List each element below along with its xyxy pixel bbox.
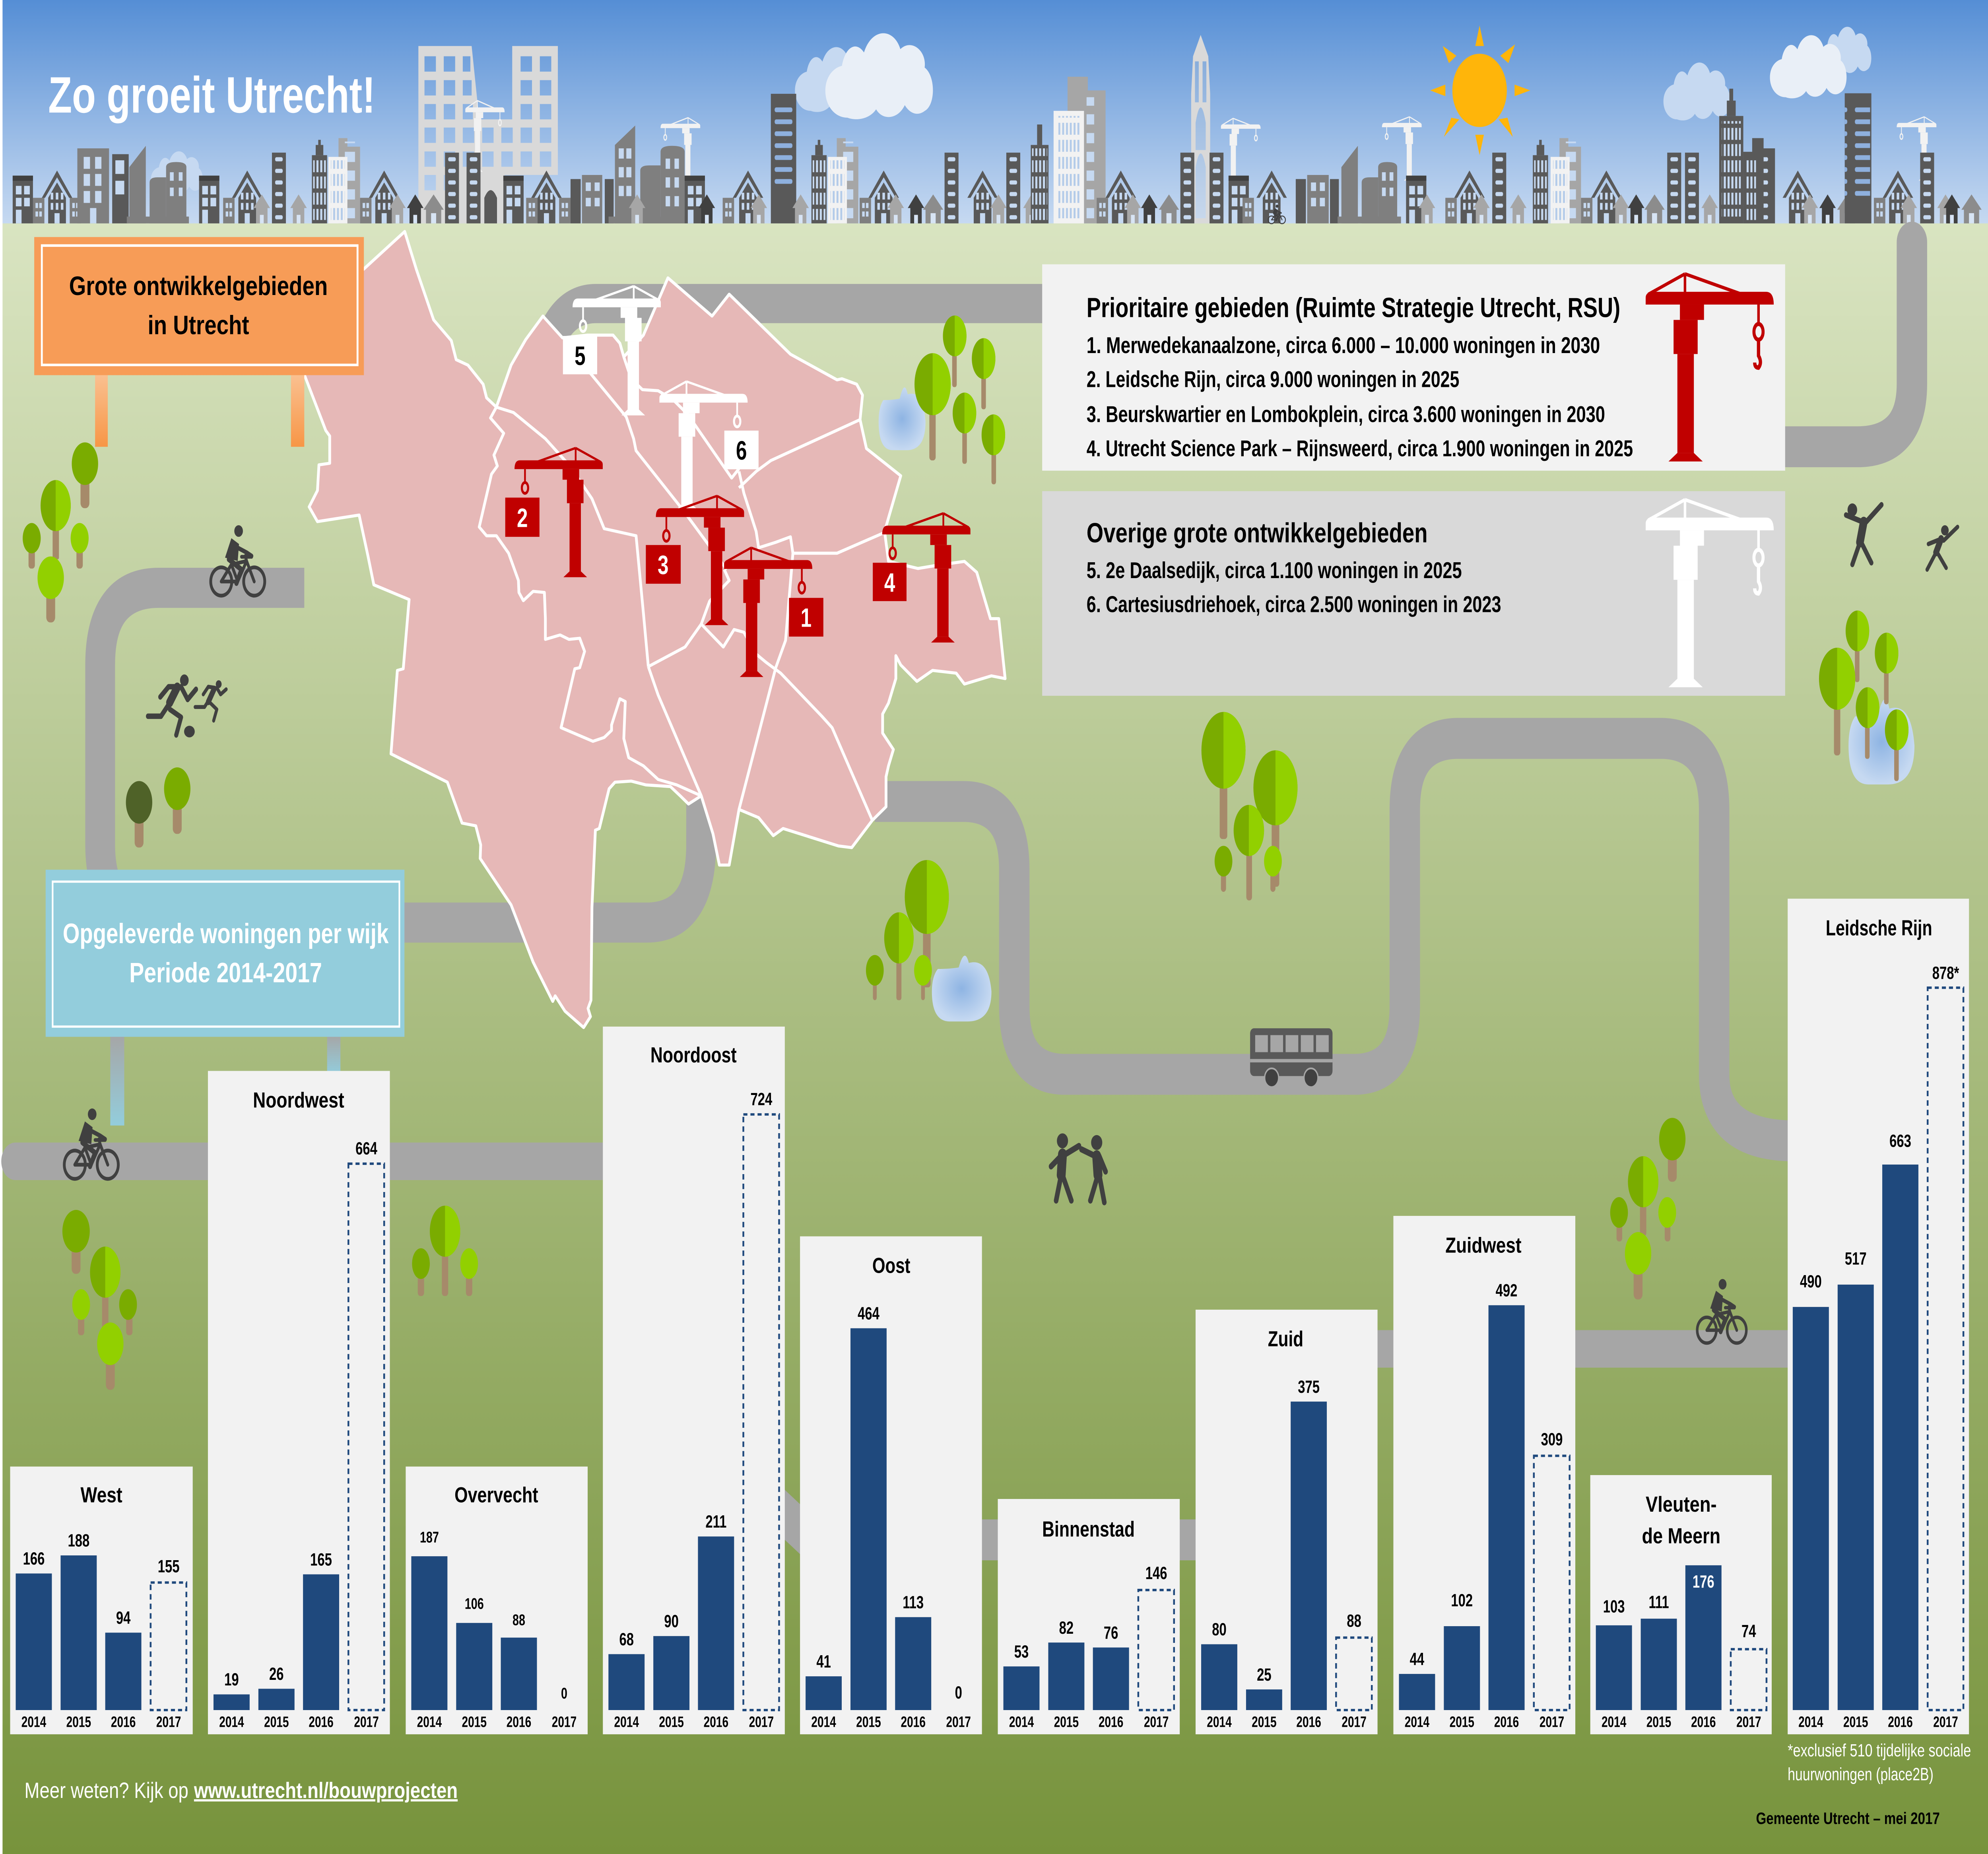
bars: 517: [1845, 1249, 1867, 1269]
list: 5. 2e Daalsedijk, circa 1.100 woningen in 2025: [1087, 558, 1462, 583]
skyline background: large building: [418, 46, 558, 223]
years: [614, 1714, 774, 1731]
years: [1602, 1714, 1761, 1731]
years: 2016: [507, 1714, 531, 1731]
crane marker 3: 3: [658, 551, 668, 580]
years: 2015: [659, 1714, 684, 1731]
years: [21, 1714, 181, 1731]
bars: [1596, 1565, 1767, 1710]
bars: [16, 1531, 186, 1710]
panel: West: [10, 1467, 193, 1734]
roads: [15, 242, 1912, 1540]
lakes: [879, 387, 1914, 1021]
sign: opgeleverde woningen: Opgeleverde woningen per wijk: [63, 918, 389, 949]
years: 2014: [1405, 1714, 1430, 1731]
heading: Leidsche Rijn: [1826, 916, 1932, 940]
heading: Overige grote ontwikkelgebieden: [1087, 517, 1428, 549]
heading: de Meern: [1642, 1524, 1720, 1548]
bars: [806, 1304, 962, 1710]
icon: white crane: [1646, 500, 1774, 687]
bars: 664: [355, 1139, 377, 1159]
bars: 309: [1541, 1430, 1563, 1449]
bars: [214, 1139, 384, 1710]
years: 2017: [1540, 1714, 1564, 1731]
years: 2014: [1207, 1714, 1232, 1731]
title: Zo groeit Utrecht!: [48, 66, 375, 124]
bars: 82: [1059, 1618, 1074, 1638]
bars: 166: [23, 1549, 45, 1569]
years: [1207, 1714, 1367, 1731]
heading: Oost: [872, 1254, 911, 1278]
heading: Zuidwest: [1445, 1233, 1522, 1258]
crane marker 4: 4: [884, 568, 895, 598]
panel: Noordoost: [603, 1027, 785, 1734]
crane marker 1: [724, 548, 823, 677]
bars: [1793, 963, 1963, 1710]
footnote: *exclusief 510 tijdelijke sociale: [1788, 1741, 1971, 1761]
years: 2015: [1252, 1714, 1277, 1731]
bars: 88: [513, 1611, 525, 1629]
icon: cyclist: [1697, 1279, 1746, 1343]
bars: 106: [465, 1596, 484, 1613]
icon: cyclist: [64, 1109, 118, 1179]
panel: Vleuten-de Meern: [1590, 1475, 1772, 1734]
crane marker 6: [659, 381, 759, 511]
years: [1009, 1714, 1169, 1731]
years: 2014: [219, 1714, 244, 1731]
bars: 88: [1347, 1611, 1361, 1631]
years: [1798, 1714, 1958, 1731]
years: [219, 1714, 379, 1731]
credit: Gemeente Utrecht – mei 2017: [1756, 1809, 1940, 1828]
bars: 53: [1014, 1642, 1029, 1662]
bars: 492: [1496, 1281, 1517, 1301]
panel: Noordwest: [208, 1071, 390, 1734]
bars: 375: [1298, 1377, 1320, 1397]
bars: 25: [1257, 1665, 1272, 1685]
years: 2017: [156, 1714, 181, 1731]
skyline buildings: [13, 77, 1982, 224]
link text: [25, 1778, 458, 1803]
bars: 188: [68, 1531, 89, 1551]
heading: [1642, 1492, 1720, 1548]
crane marker 6: 6: [736, 436, 747, 466]
list: [1087, 333, 1633, 461]
icon: soccer players: [148, 674, 226, 738]
list: 1. Merwedekanaalzone, circa 6.000 – 10.000 woningen in 2030: [1087, 333, 1600, 358]
panel: prioritaire gebieden: [1042, 264, 1785, 471]
heading: West: [80, 1483, 122, 1507]
years: 2017: [749, 1714, 774, 1731]
clouds: [151, 27, 1871, 194]
heading: Vleuten-: [1646, 1492, 1717, 1517]
bars: 464: [858, 1304, 879, 1324]
years: 2017: [946, 1714, 971, 1731]
years: 2016: [1099, 1714, 1123, 1731]
years: 2014: [417, 1714, 442, 1731]
crane marker 4: [873, 513, 971, 643]
years: 2015: [1646, 1714, 1671, 1731]
bars: [1399, 1281, 1570, 1710]
years: [811, 1714, 971, 1731]
years: 2017: [552, 1714, 577, 1731]
heading: Noordoost: [650, 1043, 737, 1068]
bars: 490: [1800, 1272, 1822, 1291]
footnote: huurwoningen (place2B): [1788, 1765, 1934, 1784]
icon: walking people: [1051, 1133, 1106, 1202]
crane marker 3: [646, 496, 744, 625]
bars: 146: [1145, 1564, 1167, 1583]
years: 2014: [21, 1714, 47, 1731]
panel: overige gebieden: [1042, 491, 1785, 696]
bars: 44: [1410, 1650, 1424, 1669]
bars: 0: [955, 1683, 962, 1703]
years: 2016: [1494, 1714, 1519, 1731]
years: 2014: [614, 1714, 639, 1731]
icon: playing figures: [1846, 503, 1957, 570]
list: 3. Beurskwartier en Lombokplein, circa 3.600 woningen in 2030: [1087, 402, 1605, 427]
sign: opgeleverde woningen: [46, 870, 404, 1126]
sign: opgeleverde woningen: Periode 2014-2017: [129, 957, 322, 988]
bars: 155: [158, 1557, 179, 1576]
bars: 19: [224, 1670, 239, 1689]
link text: www.utrecht.nl/bouwprojecten: [194, 1778, 458, 1803]
bars: 41: [816, 1652, 831, 1672]
bars: [1004, 1564, 1174, 1710]
list: 2. Leidsche Rijn, circa 9.000 woningen in 2025: [1087, 367, 1459, 392]
bars: 76: [1104, 1623, 1118, 1643]
bars: 113: [903, 1593, 924, 1612]
years: 2014: [1009, 1714, 1034, 1731]
bars: 0: [561, 1685, 567, 1702]
panel: Binnenstad: [998, 1499, 1180, 1734]
years: 2015: [264, 1714, 289, 1731]
map of Utrecht with districts: [285, 231, 1005, 1027]
bars: 878*: [1932, 963, 1959, 983]
sign: Grote ontwikkelgebieden: Grote ontwikkelgebieden: [69, 272, 328, 301]
panel: Oost: [800, 1237, 982, 1734]
bars: 80: [1212, 1620, 1227, 1639]
panel: Zuid: [1196, 1310, 1378, 1734]
years: 2014: [1602, 1714, 1627, 1731]
icon: sun: [1430, 25, 1530, 155]
years: 2017: [1736, 1714, 1761, 1731]
heading: Overvecht: [454, 1483, 538, 1507]
heading: Prioritaire gebieden (Ruimte Strategie Utrecht, RSU): [1087, 292, 1620, 324]
years: [417, 1714, 577, 1731]
years: 2016: [309, 1714, 334, 1731]
bars: 111: [1648, 1593, 1669, 1612]
bars: 724: [750, 1090, 773, 1109]
bars: 90: [664, 1612, 679, 1631]
years: 2016: [111, 1714, 136, 1731]
bars: [411, 1529, 567, 1710]
list: 6. Cartesiusdriehoek, circa 2.500 woningen in 2023: [1087, 592, 1501, 617]
years: 2016: [901, 1714, 926, 1731]
bars: 102: [1451, 1591, 1473, 1610]
crane marker 1: 1: [801, 604, 812, 633]
trees: [23, 315, 1908, 1390]
icon: cyclist: [211, 525, 265, 596]
panel: Overvecht: [406, 1467, 588, 1734]
years: 2015: [462, 1714, 487, 1731]
link text: Meer weten? Kijk op: [25, 1778, 188, 1803]
bars: 94: [116, 1608, 131, 1628]
years: 2015: [66, 1714, 91, 1731]
crane marker 5: [563, 286, 661, 415]
heading: Noordwest: [253, 1088, 344, 1112]
years: 2015: [856, 1714, 881, 1731]
crane marker 2: 2: [517, 503, 528, 533]
bars: 26: [269, 1665, 284, 1684]
years: 2015: [1054, 1714, 1079, 1731]
bars: 663: [1889, 1132, 1911, 1151]
sign: Grote ontwikkelgebieden: in Utrecht: [148, 311, 249, 340]
skyline cranes: [465, 101, 1936, 182]
sign: Grote ontwikkelgebieden: [34, 237, 364, 447]
years: 2017: [1144, 1714, 1169, 1731]
icon: Dom tower: [1188, 35, 1213, 223]
bars: 165: [310, 1550, 332, 1570]
years: 2016: [704, 1714, 728, 1731]
icon: red crane: [1646, 274, 1774, 462]
crane marker 2: [505, 448, 603, 577]
years: 2016: [1691, 1714, 1716, 1731]
years: [1405, 1714, 1564, 1731]
panel: Leidsche Rijn: [1788, 899, 1969, 1734]
bars: 211: [705, 1512, 726, 1532]
bars: 74: [1741, 1622, 1756, 1641]
bars: [608, 1090, 779, 1710]
years: 2014: [811, 1714, 836, 1731]
bars: 103: [1603, 1597, 1625, 1617]
heading: Zuid: [1268, 1327, 1303, 1351]
background sky: [0, 0, 1988, 224]
bars: 187: [420, 1529, 439, 1546]
years: 2017: [1342, 1714, 1367, 1731]
heading: Binnenstad: [1042, 1517, 1135, 1541]
list: [1087, 558, 1501, 617]
years: 2017: [1933, 1714, 1958, 1731]
icon: bus: [1250, 1028, 1332, 1087]
list: 4. Utrecht Science Park – Rijnsweerd, circa 1.900 woningen in 2025: [1087, 436, 1633, 461]
years: 2016: [1888, 1714, 1913, 1731]
panel: Zuidwest: [1393, 1216, 1575, 1734]
years: 2016: [1296, 1714, 1321, 1731]
footnote: [1788, 1741, 1971, 1784]
bars: 68: [619, 1630, 634, 1649]
bars: 176: [1693, 1572, 1714, 1592]
bars: [1201, 1377, 1372, 1710]
years: 2014: [1798, 1714, 1823, 1731]
years: 2017: [354, 1714, 379, 1731]
crane marker 5: 5: [575, 342, 586, 371]
years: 2015: [1843, 1714, 1868, 1731]
years: 2015: [1450, 1714, 1474, 1731]
